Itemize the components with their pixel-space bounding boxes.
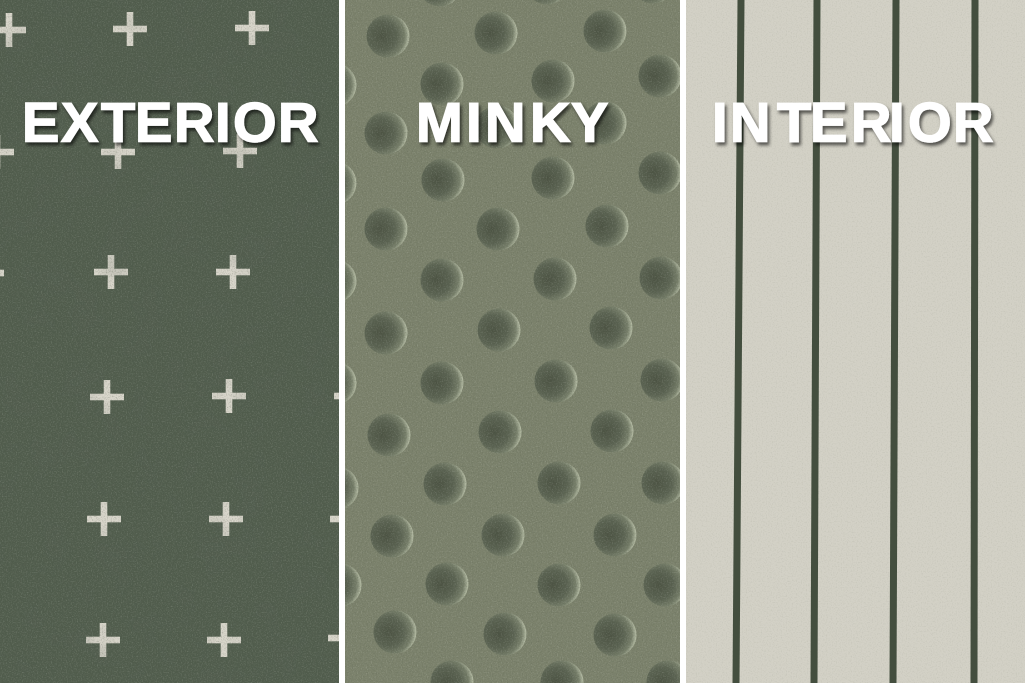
vertical stripes [736, 0, 975, 683]
heading: MINKY: MINKY [416, 90, 608, 154]
panel: exterior fabric [0, 0, 368, 683]
heading: INTERIOR: INTERIOR [712, 90, 993, 154]
panel: interior fabric [686, 0, 1025, 683]
heading: EXTERIOR: EXTERIOR [22, 90, 318, 154]
cross pattern [0, 11, 368, 657]
panel: minky fabric [345, 0, 680, 683]
raised dot pattern [345, 0, 680, 683]
